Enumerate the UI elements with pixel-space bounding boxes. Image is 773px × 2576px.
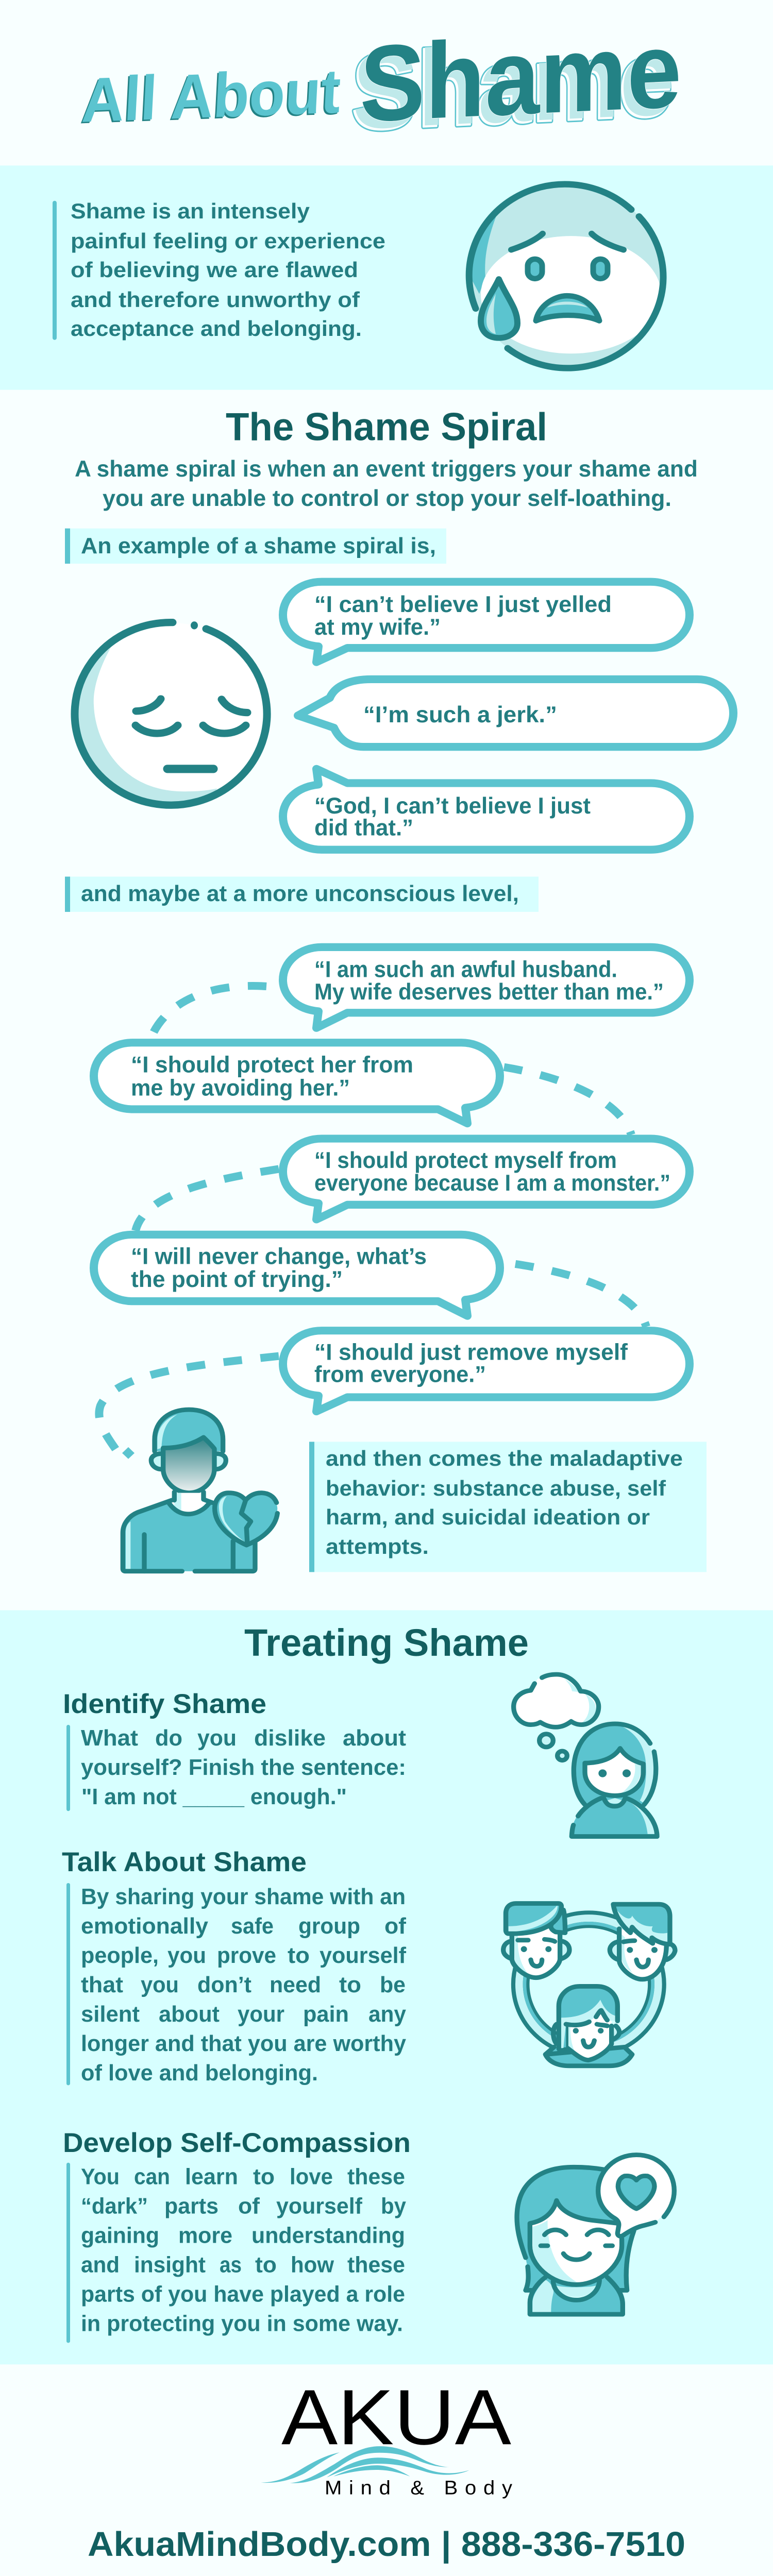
- title: Shame: Shame: [352, 16, 675, 152]
- text block: shame definition: acceptance and belonging.: [71, 317, 362, 341]
- text block: shame definition: painful feeling or experience: [71, 229, 385, 253]
- text block: spiral definition: A shame spiral is when an event triggers your shame and: [75, 455, 698, 482]
- text block: talk about shame: your: [238, 2001, 284, 2027]
- title: Shame: Shame: [351, 18, 673, 154]
- text block: talk about shame: to: [288, 1942, 310, 1968]
- heading: The Shame Spiral: The Shame Spiral: [226, 404, 547, 449]
- text block: talk about shame: silent: [81, 2001, 140, 2027]
- speech bubble: I'm such a jerk: “I’m such a jerk.”: [363, 701, 557, 727]
- dashed connector 1: [150, 986, 266, 1039]
- icon: smiling woman with heart bubble: [517, 2155, 674, 2314]
- text block: identify shame: about: [343, 1725, 406, 1751]
- speech bubble: awful husband: My wife deserves better than me.”: [314, 978, 664, 1005]
- dashed connector 3: [136, 1169, 279, 1231]
- icon: woman with thought cloud: [514, 1674, 657, 1837]
- text block: talk about shame: don’t: [197, 1972, 251, 1997]
- text block: talk about shame: that: [81, 1972, 123, 1997]
- text block: develop self-compassion: these: [347, 2164, 405, 2189]
- title: [79, 9, 682, 154]
- speech bubble: protect myself: [283, 1139, 690, 1219]
- title: All About: All About: [79, 57, 341, 137]
- speech bubble: remove myself: “I should just remove myself: [314, 1339, 628, 1365]
- speech bubble: God, I can't believe: “God, I can’t believe I just: [314, 792, 591, 819]
- text block: talk about shame: need: [270, 1972, 321, 1997]
- text block: identify shame: do: [155, 1725, 182, 1751]
- text block: identify shame: dislike: [254, 1725, 326, 1751]
- text block: talk about shame: yourself: [320, 1942, 407, 1968]
- text block: develop self-compassion: can: [134, 2164, 170, 2189]
- text block: develop self-compassion: learn: [185, 2164, 238, 2189]
- speech bubble: I can't believe I just yelled: at my wife.”: [314, 614, 441, 640]
- speech bubble: protect myself: everyone because I am a monster.”: [314, 1170, 670, 1196]
- callout: maladaptive behavior: harm, and suicidal ideation or: [326, 1505, 650, 1530]
- text block: develop self-compassion: how: [291, 2252, 334, 2277]
- text block: develop self-compassion: to: [255, 2252, 277, 2277]
- text block: identify shame: yourself? Finish the sentence:: [81, 1754, 406, 1780]
- text block: talk about shame: you: [141, 1972, 179, 1997]
- logo wave: [261, 2446, 469, 2483]
- text block: develop self-compassion: love: [290, 2164, 333, 2189]
- callout: maladaptive behavior: and then comes the maladaptive: [326, 1447, 683, 1471]
- text block: identify shame: [66, 1725, 406, 1811]
- dashed connector 5: [99, 1356, 279, 1459]
- icon: pensive face: [67, 621, 267, 813]
- text block: talk about shame: [66, 1883, 407, 2086]
- heading: Develop Self-Compassion: Develop Self-Compassion: [63, 2127, 411, 2158]
- logo tagline: Mind & Body: [325, 2477, 512, 2499]
- text block: talk about shame: you: [167, 1942, 206, 1968]
- heading: Talk About Shame: Talk About Shame: [62, 1846, 307, 1877]
- speech bubble: God, I can't believe: [283, 769, 690, 850]
- text block: develop self-compassion: as: [220, 2252, 242, 2277]
- text block: talk about shame: prove: [217, 1942, 276, 1968]
- callout: maladaptive behavior: behavior: substance abuse, self: [326, 1477, 666, 1501]
- text block: talk about shame: to: [339, 1972, 361, 1997]
- speech bubble: awful husband: “I am such an awful husband.: [314, 956, 617, 982]
- text block: identify shame: "I am not _____ enough.": [81, 1784, 347, 1809]
- text block: identify shame: What: [81, 1725, 138, 1751]
- callout: and maybe at a more unconscious level: and maybe at a more unconscious level,: [81, 880, 519, 906]
- callout: maladaptive behavior: attempts.: [326, 1535, 429, 1559]
- text block: develop self-compassion: more: [178, 2223, 232, 2248]
- speech bubble: I can't believe I just yelled: [283, 582, 690, 662]
- callout: An example of a shame spiral is: An example of a shame spiral is,: [81, 533, 436, 558]
- speech bubble: protect her from me: me by avoiding her.”: [131, 1075, 350, 1100]
- dashed connector 2: [504, 1067, 631, 1134]
- logo: AKUA Mind and Body: [261, 2374, 512, 2499]
- text block: develop self-compassion: these: [347, 2252, 405, 2277]
- callout: An example of a shame spiral is: [65, 529, 446, 564]
- panel: hero band background: [0, 165, 773, 390]
- text block: talk about shame: any: [368, 2001, 406, 2027]
- icon: group of three friends: [503, 1903, 675, 2066]
- heading: Treating Shame: Treating Shame: [244, 1622, 529, 1664]
- text block: identify shame: you: [197, 1725, 237, 1751]
- text block: talk about shame: about: [159, 2001, 220, 2027]
- text block: shame definition: [53, 199, 385, 341]
- speech bubble: remove myself: from everyone.”: [314, 1361, 486, 1387]
- contact line: AkuaMindBody.com | 888-336-7510: [88, 2526, 685, 2564]
- speech bubble: protect her from me: [94, 1043, 500, 1124]
- icon: man with broken heart: [123, 1410, 277, 1571]
- speech bubble: protect myself: “I should protect myself from: [314, 1147, 617, 1173]
- text block: talk about shame: people,: [81, 1942, 159, 1968]
- text block: develop self-compassion: in protecting you in some way.: [81, 2311, 403, 2336]
- text block: develop self-compassion: You: [81, 2164, 120, 2189]
- speech bubble: never change: [94, 1234, 500, 1316]
- callout: maladaptive behavior: [309, 1442, 707, 1572]
- speech bubble: God, I can't believe: did that.”: [314, 815, 413, 840]
- text block: talk about shame: safe: [231, 1913, 274, 1939]
- text block: spiral definition: [75, 455, 698, 511]
- text block: talk about shame: of: [384, 1913, 407, 1939]
- text block: develop self-compassion: by: [381, 2193, 406, 2218]
- title: All About: All About: [80, 56, 342, 135]
- text block: shame definition: and therefore unworthy of: [71, 288, 360, 312]
- speech bubble: remove myself: [283, 1331, 690, 1412]
- text block: develop self-compassion: insight: [134, 2252, 206, 2277]
- text block: talk about shame: longer and that you are worthy: [81, 2030, 406, 2056]
- text block: talk about shame: group: [298, 1913, 360, 1939]
- text block: develop self-compassion: parts: [164, 2193, 219, 2218]
- text block: develop self-compassion: and: [81, 2252, 120, 2277]
- text block: develop self-compassion: parts of you have played a role: [81, 2281, 405, 2307]
- speech bubble: awful husband: [283, 947, 690, 1028]
- speech bubble: never change: the point of trying.”: [131, 1266, 343, 1292]
- text block: develop self-compassion: understanding: [251, 2223, 405, 2248]
- icon: crying face: [469, 184, 663, 368]
- dashed connector 4: [515, 1264, 646, 1327]
- speech bubble: I'm such a jerk: [298, 679, 733, 747]
- speech bubble: protect her from me: “I should protect her from: [131, 1052, 413, 1077]
- text block: talk about shame: By sharing your shame with an: [81, 1884, 406, 1909]
- callout: and maybe at a more unconscious level: [65, 877, 539, 912]
- text block: spiral definition: you are unable to control or stop your self-loathing.: [103, 485, 671, 511]
- title: Shame: Shame: [360, 9, 682, 145]
- text block: talk about shame: be: [380, 1972, 406, 1997]
- text block: talk about shame: emotionally: [81, 1913, 208, 1939]
- text block: develop self-compassion: yourself: [276, 2193, 363, 2218]
- text block: develop self-compassion: to: [253, 2164, 275, 2189]
- heading: Identify Shame: Identify Shame: [63, 1688, 266, 1719]
- text block: talk about shame: pain: [303, 2001, 349, 2027]
- logo wordmark: AKUA: [281, 2374, 511, 2461]
- text block: talk about shame: of love and belonging.: [81, 2060, 318, 2086]
- text block: develop self-compassion: gaining: [81, 2223, 159, 2248]
- speech bubble: never change: “I will never change, what’s: [131, 1243, 427, 1269]
- panel: treating shame band background: [0, 1610, 773, 2364]
- text block: develop self-compassion: [66, 2163, 406, 2343]
- text block: shame definition: of believing we are flawed: [71, 258, 358, 282]
- text block: develop self-compassion: of: [238, 2193, 260, 2218]
- speech bubble: I can't believe I just yelled: “I can’t believe I just yelled: [314, 591, 612, 617]
- text block: develop self-compassion: “dark”: [81, 2193, 148, 2218]
- text block: shame definition: Shame is an intensely: [71, 199, 310, 224]
- title: Shame: Shame: [351, 18, 673, 154]
